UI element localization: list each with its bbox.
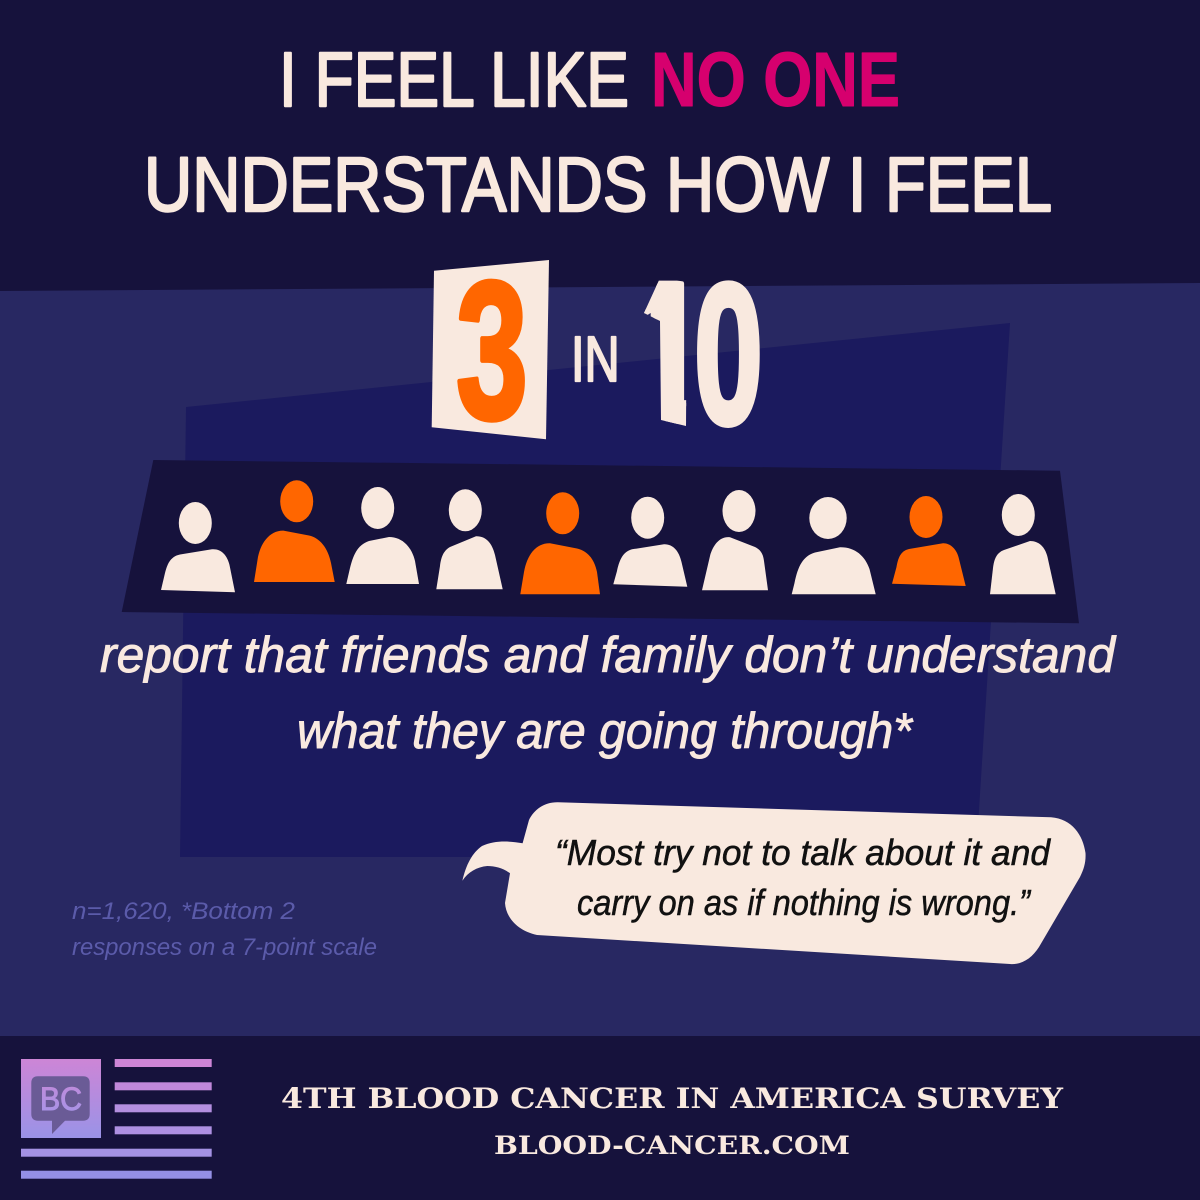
description text: report that friends and family don’t understand (100, 627, 1117, 683)
text: in: IN (571, 325, 620, 396)
title: NO ONE (651, 37, 900, 123)
person 4 (436, 489, 503, 589)
people band (122, 460, 1079, 623)
number: 10 (644, 280, 760, 428)
footnote: responses on a 7-point scale (72, 934, 377, 961)
person 2 (254, 480, 335, 582)
statistic: 3 in 10 (432, 260, 760, 440)
callout: quote bubble: carry on as if nothing is wrong.” (577, 882, 1032, 923)
callout: quote bubble: “Most try not to talk about it and (555, 832, 1051, 873)
footnote: n=1,620, *Bottom 2 (72, 898, 295, 925)
callout: quote bubble (462, 802, 1086, 964)
person 8 (792, 497, 876, 594)
number card: 3 (432, 242, 549, 460)
person 1 (161, 502, 235, 592)
footnote (72, 898, 377, 961)
person 6 (613, 497, 687, 587)
logo (21, 1059, 212, 1179)
description text (100, 627, 1117, 759)
person 7 (702, 490, 768, 590)
person 9 (892, 496, 966, 586)
number: 10: 0 (694, 243, 763, 466)
footer (0, 1036, 1200, 1200)
person 5 (520, 492, 600, 594)
footer url: BLOOD-CANCER.COM (494, 1131, 850, 1160)
person 3 (346, 487, 419, 584)
title (144, 37, 1052, 228)
logo: BC (40, 1081, 82, 1117)
person 10 (990, 494, 1056, 594)
panel: inner background (180, 323, 1010, 857)
description text: what they are going through* (297, 703, 913, 759)
number: 10: 1 (607, 239, 718, 467)
number card: 3: 3 (456, 242, 528, 460)
footer title: 4TH BLOOD CANCER IN AMERICA SURVEY (281, 1082, 1064, 1115)
title: I FEEL LIKE (279, 37, 629, 123)
title: UNDERSTANDS HOW I FEEL (144, 142, 1052, 228)
panel: main background (0, 283, 1200, 1036)
